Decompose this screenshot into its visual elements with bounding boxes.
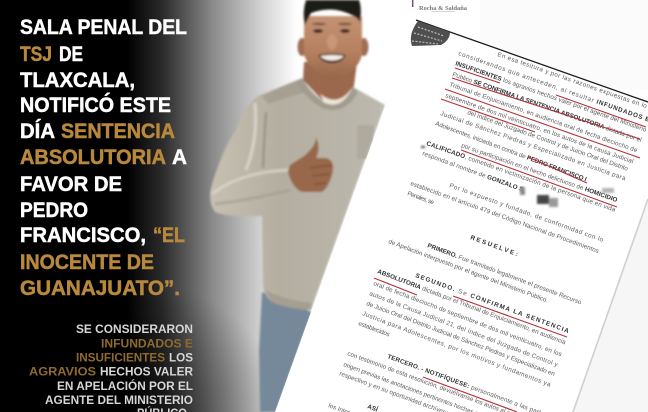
document text: INSUFICIENTES los agravios hechos valer por el agente del Ministerio	[454, 60, 648, 134]
secondary text block: AGENTE DEL MINISTERIO	[45, 395, 193, 407]
secondary text block: INFUNDADOS E	[101, 338, 193, 350]
document text: de Juicio Oral del Distrito Judicial de Sánchez Piedras y Especializado en	[365, 300, 556, 378]
document text: ABSOLUTORIA dictada por el Tribunal de Enjuiciamiento, en audiencia	[376, 268, 567, 346]
headline text: TSJ	[20, 43, 52, 66]
document text: R E S U E L V E :	[469, 234, 519, 258]
sweater logo	[357, 125, 374, 159]
document text: Público SE CONFIRMA LA SENTENCIA ABSOLUTORIA dictada por el	[451, 71, 642, 144]
document text: En esa tesitura y por las razones expuestas en lo	[496, 51, 648, 110]
headline text: TLAXCALA,	[20, 69, 135, 92]
law firm logo	[412, 0, 468, 12]
secondary text block: SE CONSIDERARON	[76, 324, 193, 336]
document text: Justicia para Adolescentes, por los motivos y fundamentos ya	[361, 310, 552, 389]
nose	[327, 34, 337, 50]
headline text: ABSOLUTORIA	[20, 146, 166, 169]
ears	[298, 38, 306, 56]
eyebrows and eyes	[312, 23, 352, 33]
document text: de Apelación interpuesto por el agente del Ministerio Público.	[387, 238, 549, 304]
document text: autos de la Causa Judicial 21, del índice del Juzgado de Control y	[368, 290, 559, 369]
document text	[327, 50, 648, 412]
law firm logo: Rocha & Saldaña	[419, 5, 468, 12]
paper sheet	[275, 20, 648, 412]
secondary text block: HECHOS VALER	[100, 366, 194, 378]
censored name blocks	[421, 146, 614, 207]
document text: Penales, se	[406, 190, 436, 206]
document text: considerandos que anteceden, al resultar INFUNDADOS E	[457, 50, 648, 124]
document text: SEGUNDO. Se CONFIRMA LA SENTENCIA	[414, 272, 570, 335]
sleeve fold shading	[246, 103, 256, 170]
document text: Adolescentes, iniciada en contra de PEDRO FRANCISCO I	[434, 120, 588, 183]
headline text: NOTIFICÓ ESTE	[20, 93, 171, 117]
hand thumbs up	[288, 137, 333, 192]
headline text: GUANAJUATO”.	[20, 277, 180, 300]
secondary text block: AGRAVIOS	[29, 366, 96, 378]
document text: CALIFICADO, cometido en victimización de la persona que en vida	[425, 140, 617, 214]
document text: septiembre de dos mil veinticuatro, en los autos de la causa Judicial	[444, 92, 634, 165]
top black edge	[416, 20, 648, 102]
document text: PRIMERO. Fue tramitado legalmente el presente Recurso	[426, 242, 583, 306]
collar rib and shoulder shade	[296, 78, 358, 110]
off-white backdrop at the right	[480, 0, 648, 90]
document text: responda al nombre de GONZALO S	[421, 150, 524, 193]
page edge shadow	[573, 199, 648, 412]
red highlight underlines	[374, 68, 646, 412]
headline text: “EL	[153, 224, 185, 247]
document text: Por lo expuesto y fundado, de conformidad con lo	[448, 182, 605, 244]
secondary text block: LOS	[169, 352, 193, 364]
headline text	[20, 16, 187, 300]
face	[304, 16, 362, 81]
smile	[318, 54, 346, 63]
document text: Tribunal de Enjuiciamiento, en audiencia oral de fecha dieciocho de	[448, 81, 639, 154]
document text: oral de fecha dieciocho de septiembre de dos mil veinticuatro, en los	[372, 280, 563, 358]
headline text: PEDRO	[20, 199, 88, 222]
document page	[275, 20, 648, 412]
official seal	[411, 21, 450, 46]
headline text: DE	[59, 43, 83, 66]
sweater	[210, 78, 385, 310]
headline text: SALA PENAL DEL	[20, 16, 187, 39]
headline text: FAVOR DE	[20, 173, 122, 196]
secondary text block: INSUFICIENTES	[76, 352, 165, 364]
secondary text block: EN APELACIÓN POR EL	[57, 380, 193, 393]
headline text: INOCENTE DE	[20, 251, 154, 274]
headline text: SENTENCIA	[61, 120, 175, 143]
hair	[304, 0, 361, 25]
neck	[303, 62, 357, 104]
document text: del índice del Juzgado de Control y de Juicio Oral del Distrito	[466, 109, 629, 173]
document text: establecido en el artículo 479 del Código Nacional de Procedimientos	[409, 180, 600, 255]
photo: smiling man giving thumbs up	[210, 0, 385, 412]
headline text: FRANCISCO,	[20, 224, 146, 247]
corner background	[570, 195, 648, 412]
document text: Judicial de Sánchez Piedras y Especializado en Justicia para	[439, 110, 627, 182]
white t-shirt collar	[320, 88, 354, 105]
headline text: DÍA	[20, 120, 55, 143]
secondary text block	[29, 324, 194, 412]
document text: por su participación en el hecho delictuoso de HOMICIDIO	[460, 142, 618, 204]
jeans	[259, 292, 312, 412]
headline text: A	[172, 146, 187, 169]
document text: establecidos	[357, 320, 391, 338]
